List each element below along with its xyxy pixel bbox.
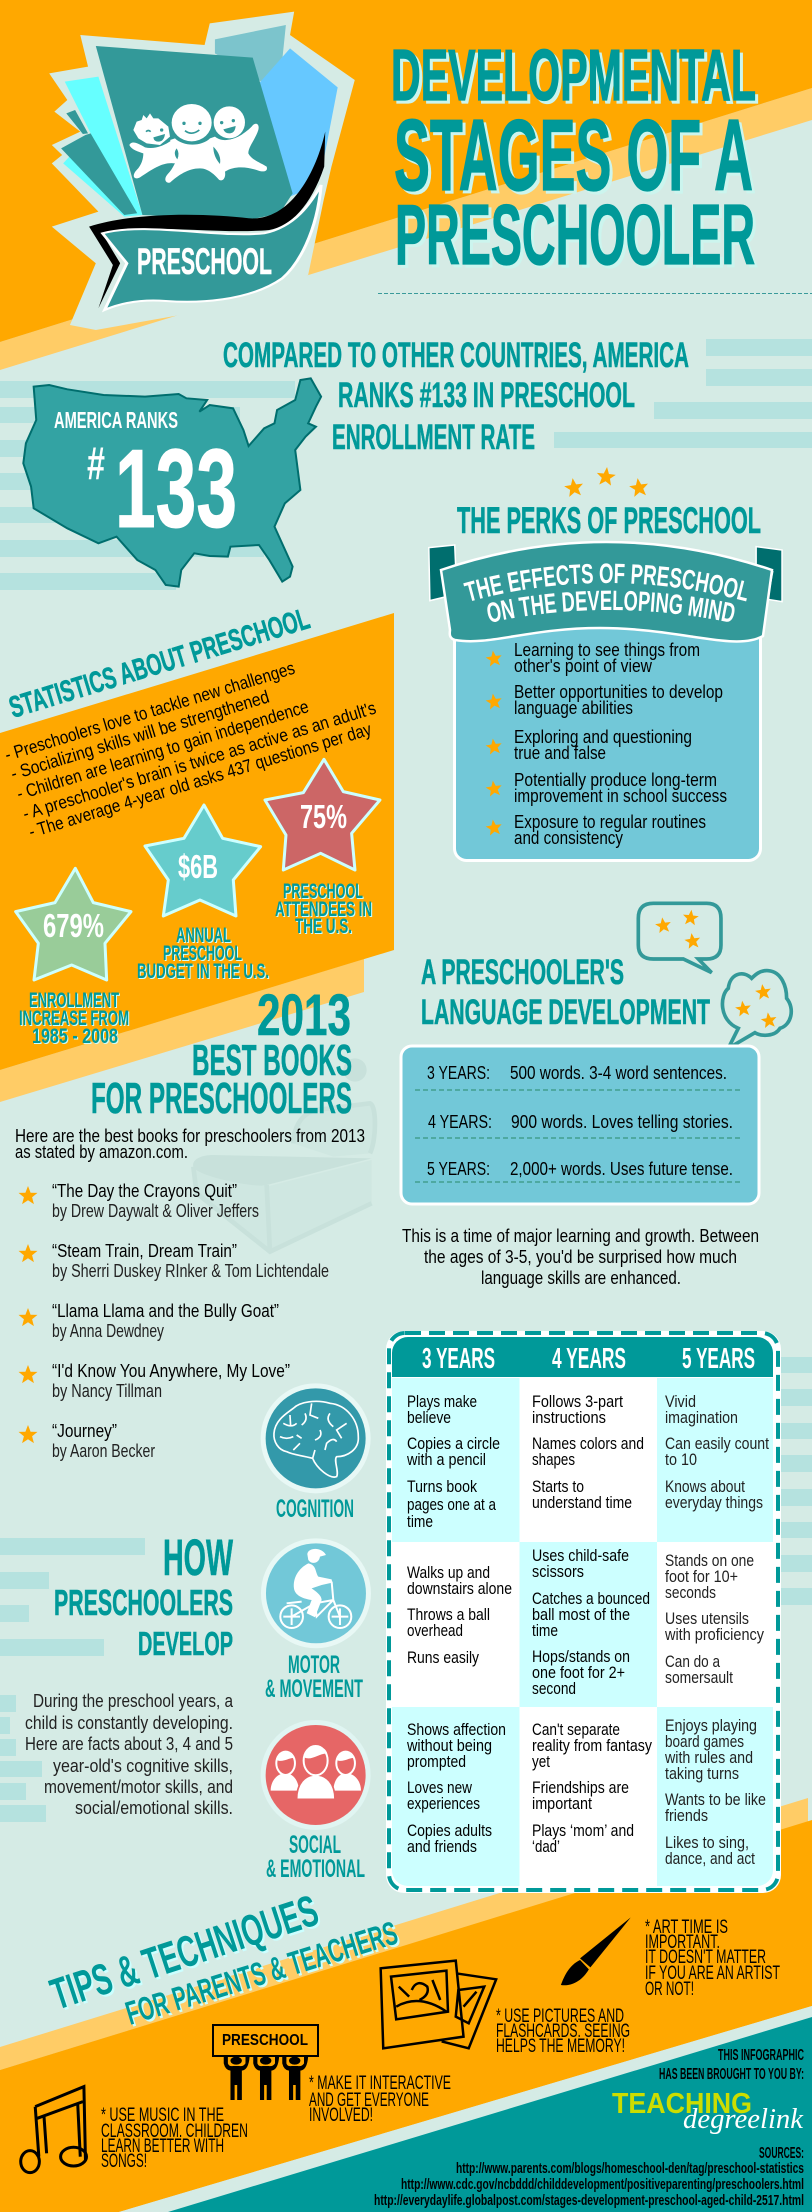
tip: interactive: AND GET EVERYONE xyxy=(309,2090,429,2111)
banner xyxy=(441,542,772,642)
book authors: by Nancy Tillman xyxy=(52,1381,162,1401)
table column: 5 years: Vivid xyxy=(665,1392,696,1411)
book authors: by Anna Dewdney xyxy=(52,1321,164,1341)
stat captions: 1985 - 2008 xyxy=(32,1025,118,1048)
star: 679% xyxy=(16,868,131,980)
icon: people holding preschool sign: PRESCHOOL xyxy=(222,2032,308,2049)
stat captions: INCREASE FROM xyxy=(19,1007,129,1030)
stat captions: THE U.S. xyxy=(295,915,352,938)
language paragraph: language skills are enhanced. xyxy=(481,1268,681,1288)
book authors: by Drew Daywalt & Oliver Jeffers xyxy=(52,1201,259,1221)
icon: pictures and flashcards xyxy=(381,1961,496,2048)
tip: pictures: HELPS THE MEMORY! xyxy=(496,2036,625,2057)
icon: book stack watermark xyxy=(193,1058,375,1252)
stat captions: ATTENDEES IN xyxy=(275,898,372,921)
logo: teaching degreelink: degreelink xyxy=(683,2104,804,2135)
heading: America compared: RANKS #133 IN PRESCHOOL xyxy=(338,376,635,415)
table column: 3 years: without being xyxy=(406,1736,492,1755)
table column: 4 years: Uses child-safe xyxy=(532,1546,629,1565)
main cover xyxy=(96,46,293,220)
icon: people holding preschool sign xyxy=(213,2025,318,2100)
bottom orange background xyxy=(0,1798,812,2212)
heading: best books: BEST BOOKS xyxy=(192,1036,352,1085)
book titles xyxy=(52,1181,290,1441)
stat captions: ANNUAL xyxy=(177,925,232,948)
table column: 3 years: Turns book xyxy=(407,1477,477,1496)
tip: pictures: * USE PICTURES AND xyxy=(496,2006,624,2027)
table column: 5 years: everyday things xyxy=(665,1493,763,1512)
perks stars xyxy=(485,649,503,836)
logo: teaching degreelink: TEACHING xyxy=(612,2088,752,2120)
heading: language development: A PRESCHOOLER'S xyxy=(421,953,624,992)
table column: 4 years: Friendships are xyxy=(532,1778,629,1797)
develop paragraph: year-old's cognitive skills, xyxy=(53,1756,233,1776)
tip: music: LEARN BETTER WITH xyxy=(101,2136,224,2157)
table column: 5 years: Knows about xyxy=(665,1477,745,1496)
stat captions: ATTENDEES IN xyxy=(276,899,373,922)
ribbon black edge xyxy=(89,132,325,308)
perks text xyxy=(514,640,727,848)
tip: interactive: INVOLVED! xyxy=(309,2105,373,2126)
table column: 5 years: with rules and xyxy=(664,1748,753,1767)
language rows: 4 YEARS: xyxy=(428,1112,492,1132)
table column: 4 years: ‘dad’ xyxy=(532,1837,560,1856)
table column: 4 years: instructions xyxy=(532,1408,606,1427)
table column: 4 years: reality from fantasy xyxy=(532,1736,652,1755)
table column: 4 years: one foot for 2+ xyxy=(532,1663,625,1682)
label: social and emotional xyxy=(266,1831,365,1883)
language paragraph: the ages of 3-5, you'd be surprised how much xyxy=(424,1247,737,1267)
perks text: Potentially produce long-term xyxy=(514,770,717,790)
table column: 4 years: Can't separate xyxy=(532,1720,620,1739)
heading: best books xyxy=(91,983,352,1123)
tip: pictures xyxy=(496,2006,630,2057)
table column: 5 years: Likes to sing, xyxy=(665,1833,749,1852)
badge outline xyxy=(49,12,355,330)
icon: three stars xyxy=(563,466,650,497)
statistics list: - The average 4-year old asks 437 questions per day xyxy=(26,719,374,842)
heading: tips and techniques xyxy=(45,1886,404,2034)
table column: 5 years: Uses utensils xyxy=(665,1609,749,1628)
perks text: language abilities xyxy=(514,698,633,718)
label: cognition: COGNITION xyxy=(276,1495,354,1523)
table column: 4 years: Follows 3-part xyxy=(532,1392,623,1411)
rank number: 133 xyxy=(115,427,237,551)
table column: 5 years xyxy=(664,1392,769,1868)
heading: how preschoolers develop xyxy=(54,1529,233,1662)
map label: AMERICA RANKS xyxy=(54,407,178,433)
stat numbers: $6B xyxy=(178,848,218,885)
top orange diagonal background xyxy=(0,0,812,370)
heading: tips and techniques: FOR PARENTS & TEACHERS xyxy=(123,1916,404,2034)
table column: 3 years: Plays make xyxy=(407,1392,477,1411)
table column: 5 years: board games xyxy=(665,1732,744,1751)
ribbon xyxy=(103,185,321,310)
tip: pictures: FLASHCARDS. SEEING xyxy=(496,2021,630,2042)
perks text: Learning to see things from xyxy=(514,640,700,660)
tip: music xyxy=(101,2105,248,2172)
panel: language by age xyxy=(401,1046,759,1204)
heading: how preschoolers develop: PRESCHOOLERS xyxy=(54,1582,233,1623)
table column: 5 years: seconds xyxy=(665,1583,716,1602)
star: 75% xyxy=(265,759,380,870)
table column: 4 years: scissors xyxy=(532,1562,584,1581)
logo: preschool book badge xyxy=(49,12,355,330)
hash sign: # xyxy=(87,437,105,489)
stat stars xyxy=(16,759,380,980)
table column: 4 years: Names colors and xyxy=(532,1434,644,1453)
title xyxy=(391,36,759,286)
stat captions: ENROLLMENT xyxy=(30,990,120,1013)
tip: music: * USE MUSIC IN THE xyxy=(101,2105,224,2126)
heading: tips and techniques: TIPS & TECHNIQUES xyxy=(45,1886,324,2019)
language rows: 3 YEARS: xyxy=(427,1063,490,1083)
credit: brought to you by xyxy=(659,2047,804,2083)
heading: how preschoolers develop: HOW xyxy=(163,1529,233,1586)
label: social and emotional: SOCIAL xyxy=(289,1831,341,1859)
back page xyxy=(215,25,286,83)
table column: 4 years: shapes xyxy=(532,1450,575,1469)
table cells xyxy=(392,1337,773,1886)
table column: 5 years: somersault xyxy=(665,1668,733,1687)
decorative stripes xyxy=(0,339,812,1822)
statistics list: - A preschooler's brain is twice as active as an adult's xyxy=(20,698,378,824)
develop paragraph: movement/motor skills, and xyxy=(44,1777,233,1797)
book titles: “Journey” xyxy=(52,1421,117,1441)
heading: language development xyxy=(421,953,710,1032)
panel: statistics background xyxy=(0,613,394,1102)
table column: 3 years: Loves new xyxy=(407,1778,473,1797)
table column: 3 years: Throws a ball xyxy=(407,1605,490,1624)
label: social and emotional: & EMOTIONAL xyxy=(266,1855,365,1883)
book authors xyxy=(52,1201,329,1461)
table column: 5 years: taking turns xyxy=(665,1764,739,1783)
table column: 3 years: pages one at a xyxy=(407,1495,496,1514)
develop paragraph xyxy=(25,1691,234,1818)
heading: tips and techniques: FOR PARENTS & TEACHERS xyxy=(121,1914,402,2032)
language rows: 500 words. 3-4 word sentences. xyxy=(510,1063,727,1083)
heading: America compared: ENROLLMENT RATE xyxy=(332,418,535,457)
book titles: “The Day the Crayons Quit” xyxy=(52,1181,237,1201)
icon: group of people xyxy=(261,1720,371,1830)
language rows xyxy=(427,1063,733,1179)
tip: interactive: * MAKE IT INTERACTIVE xyxy=(309,2073,451,2094)
develop paragraph: During the preschool years, a xyxy=(33,1691,234,1711)
stat captions: PRESCHOOL xyxy=(163,942,242,965)
heading: how preschoolers develop: DEVELOP xyxy=(138,1625,233,1662)
table column: 5 years: dance, and act xyxy=(665,1849,755,1868)
book titles: “Steam Train, Dream Train” xyxy=(52,1241,237,1261)
books list xyxy=(18,1181,329,1461)
icon: paintbrush xyxy=(561,1917,631,1985)
table header: 4 YEARS xyxy=(552,1343,626,1375)
panel: perks list xyxy=(428,540,783,862)
table column: 4 years: Hops/stands on xyxy=(532,1647,630,1666)
book titles: “Llama Llama and the Bully Goat” xyxy=(52,1301,279,1321)
table header: 5 YEARS xyxy=(682,1343,755,1375)
list stars xyxy=(18,1186,38,1443)
tip: art time: OR NOT! xyxy=(645,1979,694,2000)
perks text: Exposure to regular routines xyxy=(514,812,706,832)
map of USA with rank xyxy=(23,378,321,587)
small teal page xyxy=(66,110,88,134)
develop paragraph: Here are facts about 3, 4 and 5 xyxy=(25,1734,233,1754)
label: motor and movement xyxy=(265,1651,363,1703)
book authors: by Aaron Becker xyxy=(52,1441,155,1461)
sources xyxy=(374,2145,804,2209)
tip: music: CLASSROOM. CHILDREN xyxy=(101,2121,248,2142)
stat numbers xyxy=(43,798,347,944)
table column: 5 years: foot for 10+ xyxy=(665,1567,738,1586)
panel: perks list: ON THE DEVELOPING MIND xyxy=(487,590,735,622)
table column: 3 years: Copies adults xyxy=(407,1821,492,1840)
logo: teaching degreelink xyxy=(612,2088,804,2135)
table column: 3 years: experiences xyxy=(407,1794,480,1813)
tip: art time xyxy=(645,1917,780,2000)
banner tails xyxy=(429,545,782,602)
table column: 3 years: downstairs alone xyxy=(407,1579,512,1598)
table column: 5 years: Can easily count xyxy=(665,1434,769,1453)
table column: 5 years: friends xyxy=(665,1806,708,1825)
stat captions: PRESCHOOL xyxy=(283,880,363,903)
tip: art time: * ART TIME IS xyxy=(645,1917,728,1938)
table column: 5 years: with proficiency xyxy=(664,1625,764,1644)
books intro text: Here are the best books for preschoolers from 2013 xyxy=(15,1126,365,1146)
table column: 4 years: yet xyxy=(532,1752,550,1771)
statistics list: - Children are learning to gain independence xyxy=(14,696,311,804)
table column: 3 years: prompted xyxy=(407,1752,466,1771)
language rows: 900 words. Loves telling stories. xyxy=(511,1112,733,1132)
icon: three children xyxy=(129,104,267,183)
books intro text xyxy=(15,1126,365,1162)
icon: speech bubble xyxy=(638,903,721,973)
stat numbers: 75% xyxy=(300,798,347,835)
perks text: and consistency xyxy=(514,828,623,848)
heading: best books: FOR PRESCHOOLERS xyxy=(91,1074,352,1123)
table column: 4 years: second xyxy=(532,1679,576,1698)
tip: music: SONGS! xyxy=(101,2151,147,2172)
statistics list: - Preschoolers love to tackle new challenges xyxy=(2,658,297,765)
language rows: 2,000+ words. Uses future tense. xyxy=(510,1159,733,1179)
stat captions: THE U.S. xyxy=(296,916,353,939)
label: motor and movement: MOTOR xyxy=(288,1651,340,1679)
table header xyxy=(422,1343,755,1375)
book titles: “I'd Know You Anywhere, My Love” xyxy=(52,1361,290,1381)
stat captions: BUDGET IN THE U.S. xyxy=(137,960,269,983)
stat captions: BUDGET IN THE U.S. xyxy=(138,961,270,984)
star: $6B xyxy=(145,805,261,916)
stat numbers: 679% xyxy=(43,907,104,944)
develop paragraph: child is constantly developing. xyxy=(25,1713,233,1733)
perks text: improvement in school success xyxy=(514,786,727,806)
stat captions: PRESCHOOL xyxy=(284,881,364,904)
books intro text: as stated by amazon.com. xyxy=(15,1142,188,1162)
table column: 3 years: with a pencil xyxy=(406,1450,486,1469)
table column: 3 years: time xyxy=(407,1512,433,1531)
heading: America compared xyxy=(223,336,689,457)
table column: 3 years: and friends xyxy=(407,1837,477,1856)
table column: 3 years: Walks up and xyxy=(407,1563,490,1582)
language paragraph: This is a time of major learning and growth. Between xyxy=(402,1226,759,1246)
table column: 4 years: Catches a bounced xyxy=(532,1589,650,1608)
table column: 4 years: understand time xyxy=(532,1493,632,1512)
logo ribbon text: PRESCHOOL xyxy=(137,241,272,282)
label: motor and movement: & MOVEMENT xyxy=(265,1675,363,1703)
icon: thought bubble xyxy=(722,971,791,1048)
table column: 4 years: time xyxy=(532,1621,558,1640)
left teal pages xyxy=(61,133,137,215)
perks text: Exploring and questioning xyxy=(514,727,692,747)
table column: 4 years xyxy=(532,1392,652,1856)
icon: cognition brain xyxy=(261,1383,371,1493)
table column: 5 years: imagination xyxy=(665,1408,738,1427)
blue page xyxy=(259,48,338,197)
statistics list xyxy=(2,658,378,842)
cyan pages xyxy=(63,77,142,217)
stat captions: ANNUAL xyxy=(176,924,231,947)
table column: 4 years: Starts to xyxy=(532,1477,584,1496)
language rows: 5 YEARS: xyxy=(427,1159,490,1179)
table column: 5 years: Stands on one xyxy=(665,1551,754,1570)
table column: 5 years: Can do a xyxy=(665,1652,720,1671)
book authors: by Sherri Duskey RInker & Tom Lichtendale xyxy=(52,1261,329,1281)
stat captions xyxy=(19,880,373,1049)
table column: 3 years: Copies a circle xyxy=(407,1434,500,1453)
heading: tips and techniques: TIPS & TECHNIQUES xyxy=(47,1888,326,2021)
table: development by age xyxy=(386,1331,781,1893)
tip: art time: IMPORTANT. xyxy=(645,1932,720,1953)
table column: 3 years xyxy=(406,1392,512,1856)
heading: best books: 2013 xyxy=(257,983,351,1048)
perks text: true and false xyxy=(514,743,606,763)
heading: statistics about preschool: STATISTICS ABOUT PRESCHOOL xyxy=(5,602,314,725)
table column: 5 years: Wants to be like xyxy=(665,1790,766,1809)
tip: interactive xyxy=(309,2073,451,2126)
perks text: other's point of view xyxy=(514,656,653,676)
icon: child on bicycle xyxy=(261,1538,371,1648)
table column: 3 years: believe xyxy=(407,1408,451,1427)
table column: 3 years: Runs easily xyxy=(407,1648,479,1667)
perks text: Better opportunities to develop xyxy=(514,682,723,702)
table column: 3 years: Shows affection xyxy=(407,1720,506,1739)
stat captions: ENROLLMENT xyxy=(29,989,119,1012)
stat captions: PRESCHOOL xyxy=(164,943,243,966)
table column: 4 years: ball most of the xyxy=(532,1605,630,1624)
stat captions: INCREASE FROM xyxy=(20,1008,130,1031)
table column: 4 years: important xyxy=(532,1794,592,1813)
table column: 5 years: Enjoys playing xyxy=(665,1716,757,1735)
table column: 3 years: overhead xyxy=(407,1621,463,1640)
stat captions: 1985 - 2008 xyxy=(33,1026,119,1049)
usa map shape xyxy=(23,378,321,587)
statistics list: - Socializing skills will be strengthened xyxy=(8,686,272,784)
table column: 4 years: Plays ‘mom’ and xyxy=(532,1821,634,1840)
icon: music note xyxy=(21,2087,86,2173)
banner text: THE EFFECTS OF PRESCHOOL xyxy=(463,563,747,602)
develop paragraph: social/emotional skills. xyxy=(75,1798,233,1818)
table column: 5 years: to 10 xyxy=(665,1450,697,1469)
table header: 3 YEARS xyxy=(422,1343,495,1375)
language paragraph xyxy=(402,1226,759,1288)
